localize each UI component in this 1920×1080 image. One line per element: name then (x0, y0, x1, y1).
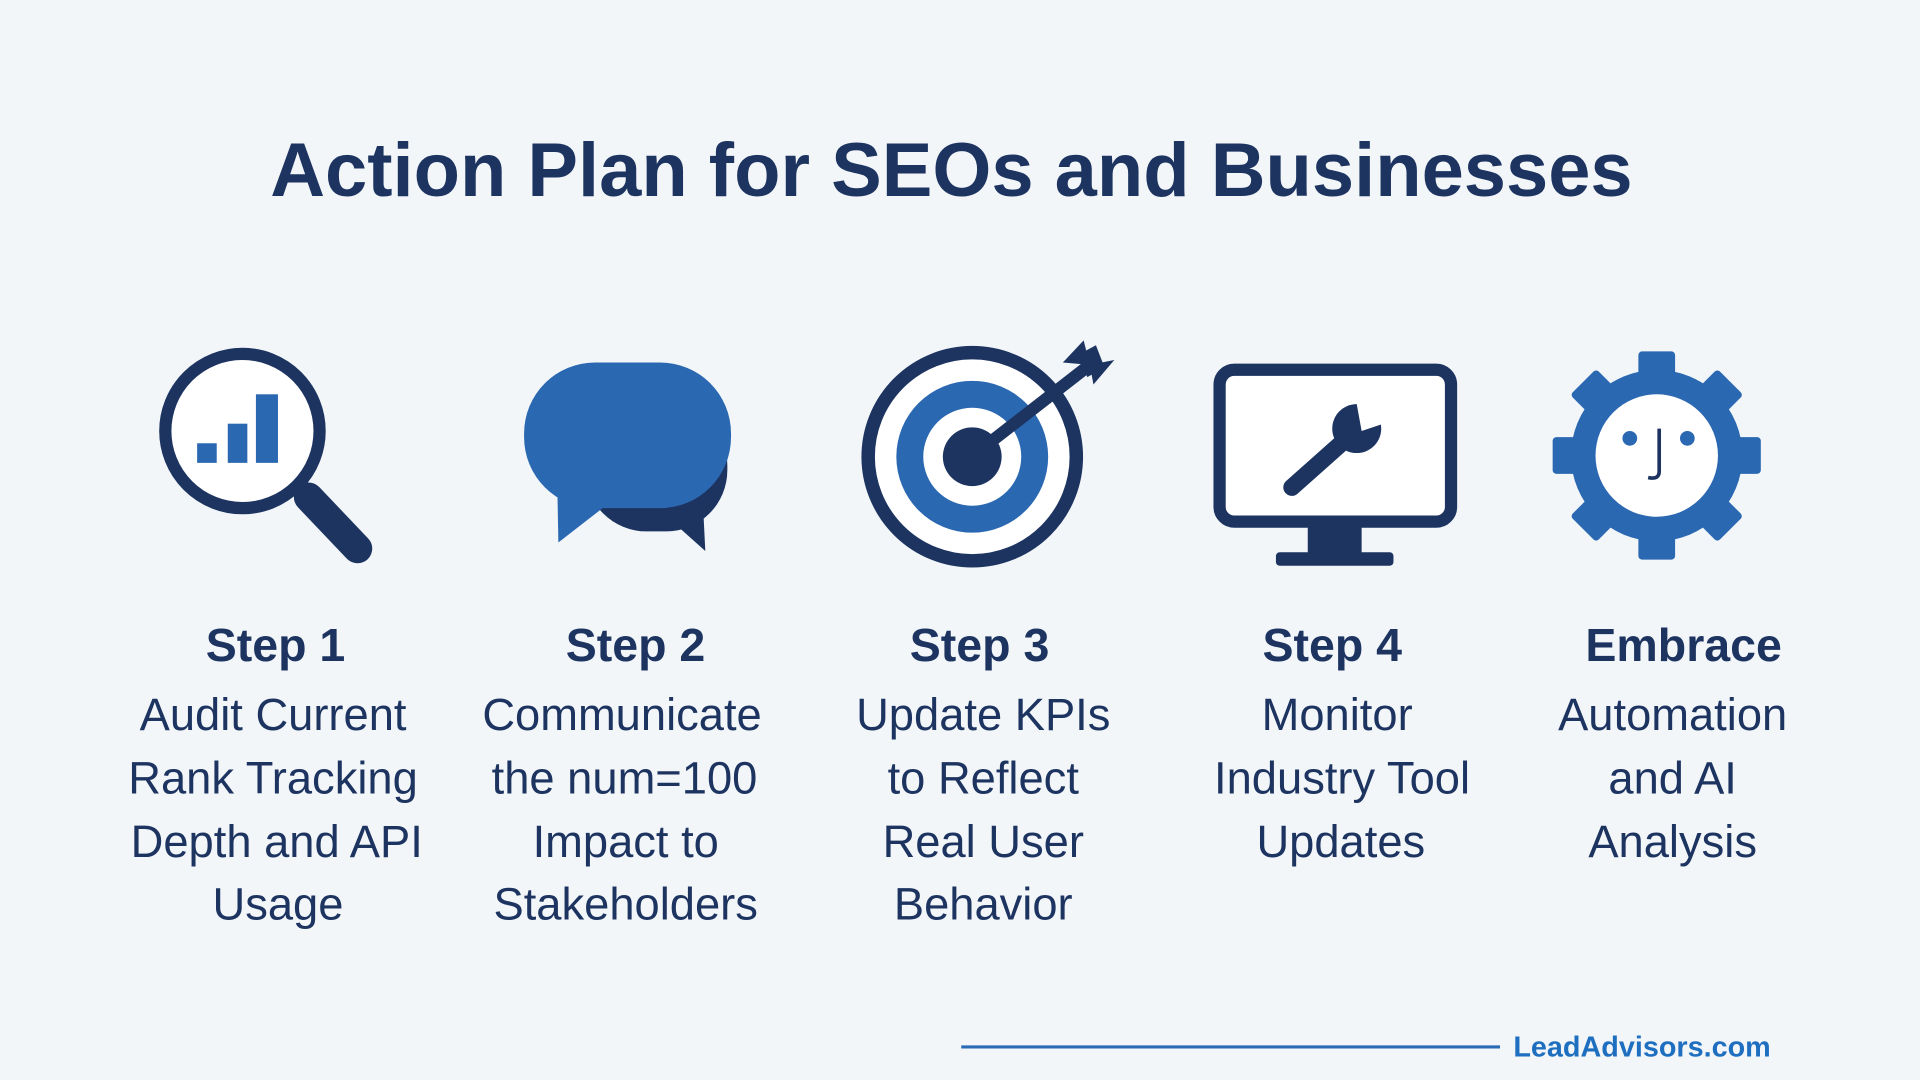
footer brand: LeadAdvisors.com (1513, 1032, 1771, 1064)
embrace text: and AI (1608, 752, 1737, 803)
icon: magnifier with bar chart (165, 354, 358, 549)
step 4 text: Updates (1256, 816, 1425, 867)
step 3 text: to Reflect (888, 752, 1079, 803)
step 4 text (1214, 619, 1470, 867)
step 3 text: Real User (883, 816, 1084, 867)
step 2 text: the num=100 (492, 752, 757, 803)
icon: speech bubbles (524, 362, 731, 551)
step 2 text: Impact to (533, 816, 719, 867)
icon: target with arrow (868, 340, 1114, 561)
step 4 text: Step 4 (1262, 619, 1402, 671)
step 3 text: Update KPIs (856, 689, 1110, 740)
step 1 text: Step 1 (206, 619, 345, 671)
step 4 text: Industry Tool (1214, 752, 1470, 803)
step 3 text: Step 3 (910, 619, 1049, 671)
step 3 text: Behavior (894, 879, 1073, 930)
step 2 text: Communicate (482, 689, 762, 740)
title: Action Plan for SEOs and Businesses (270, 128, 1633, 213)
step 2 text: Step 2 (566, 619, 705, 671)
step 2 text: Stakeholders (494, 879, 758, 930)
embrace text (1558, 619, 1787, 867)
step 1 text: Audit Current (140, 689, 407, 740)
embrace text: Automation (1558, 689, 1787, 740)
step 1 text: Depth and API (131, 816, 423, 867)
step 3 text (856, 619, 1110, 930)
step 1 text: Rank Tracking (128, 752, 418, 803)
footer line (961, 1046, 1500, 1048)
embrace text: Analysis (1588, 816, 1757, 867)
step 4 text: Monitor (1262, 689, 1413, 740)
embrace text: Embrace (1585, 619, 1782, 671)
icon: monitor with wrench (1220, 370, 1451, 566)
step 1 text: Usage (212, 879, 343, 930)
icon: gear with face (1553, 351, 1761, 560)
step 1 text (128, 619, 423, 930)
step 2 text (482, 619, 762, 930)
